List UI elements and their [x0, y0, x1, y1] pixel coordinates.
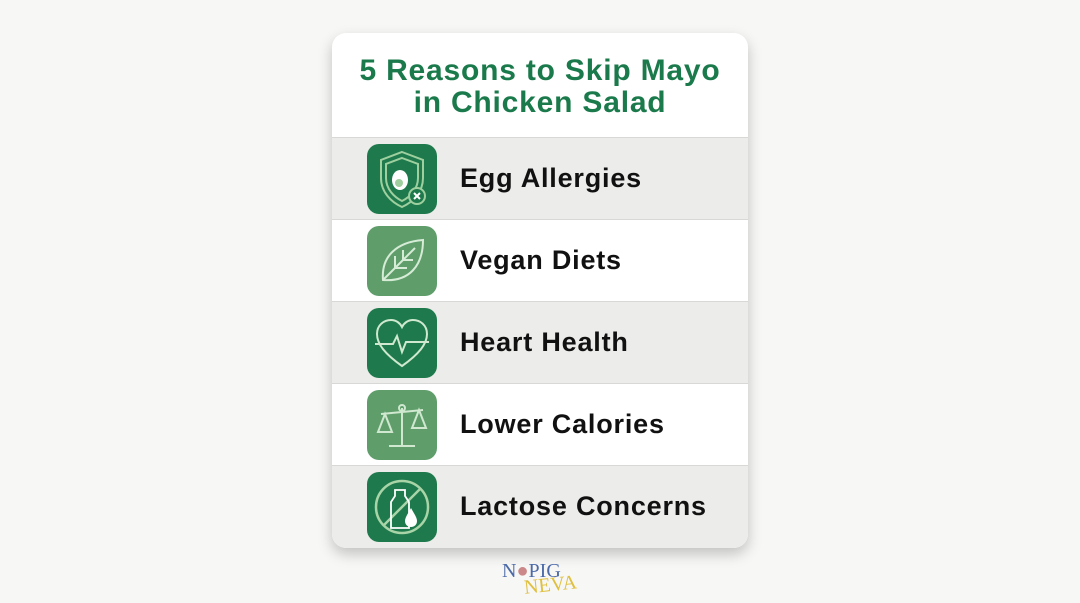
label: Lower Calories [460, 409, 665, 439]
icon: shield egg [367, 144, 437, 214]
row: egg allergies [332, 137, 748, 220]
icon: scale [367, 390, 437, 460]
label: Lactose Concerns [460, 491, 707, 521]
label: Heart Health [460, 327, 629, 357]
label: Vegan Diets [460, 245, 622, 275]
title: 5 Reasons to Skip Mayo [359, 54, 721, 87]
logo: N●PIG [502, 560, 561, 582]
logo: NEVA [523, 571, 578, 599]
icon: leaf [367, 226, 437, 296]
label: Egg Allergies [460, 163, 642, 193]
title: in Chicken Salad [414, 86, 666, 119]
icon: no milk [367, 472, 437, 542]
card [332, 33, 748, 548]
icon: heart [367, 308, 437, 378]
row: lactose concerns [332, 465, 748, 549]
row: heart health [332, 301, 748, 384]
row: lower calories [332, 383, 748, 466]
logo [502, 560, 578, 599]
title [359, 54, 721, 119]
row: vegan diets [332, 219, 748, 302]
